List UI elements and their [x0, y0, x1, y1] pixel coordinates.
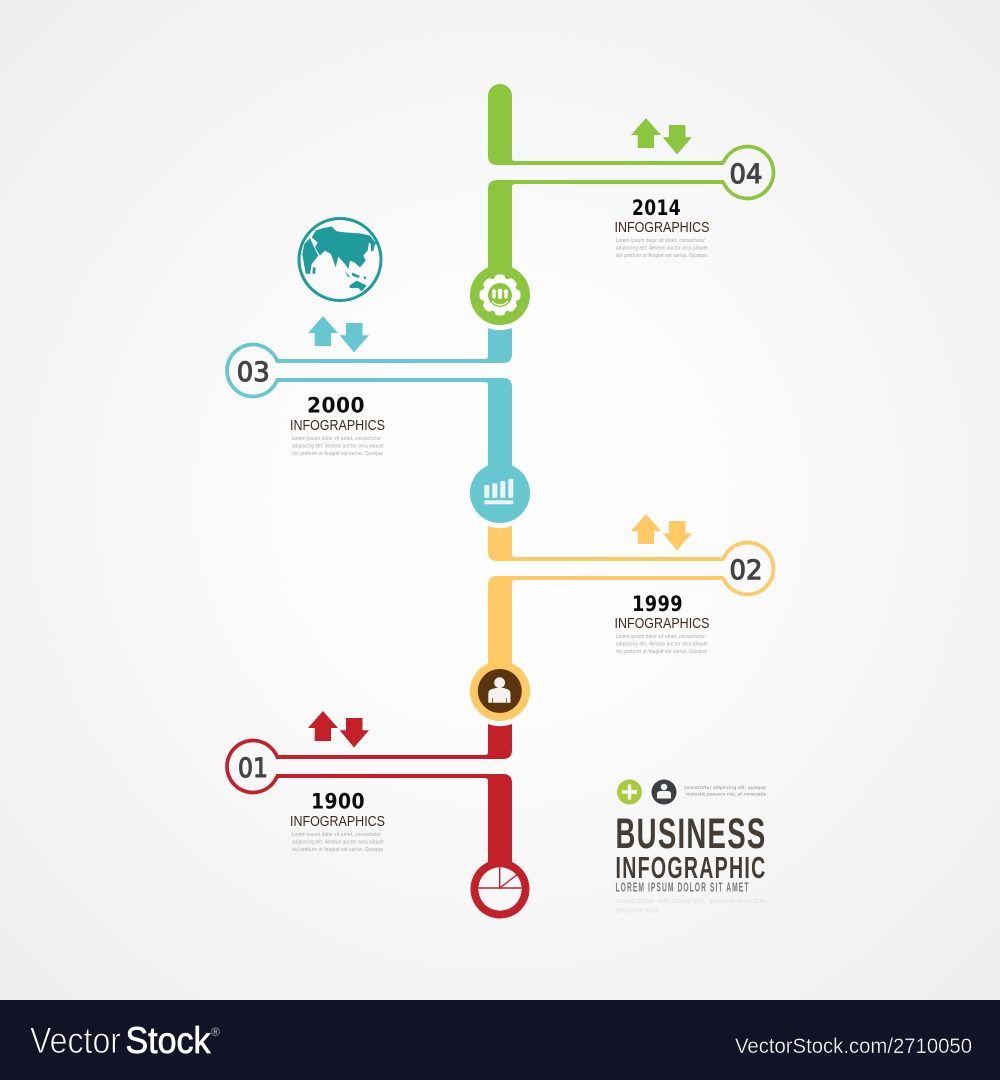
- year label 2014: Lorem ipsum dolor sit amet, consectetur: [616, 238, 706, 244]
- year label 1900: Lorem ipsum dolor sit amet, consectetur: [292, 832, 382, 838]
- heading: infographic: INFOGRAPHIC: [616, 851, 766, 885]
- footer bar: [0, 1000, 1000, 1080]
- icon: gear with people: [470, 265, 530, 325]
- number ring 02: [723, 543, 774, 595]
- caption: [684, 785, 767, 798]
- logo: [30, 1020, 220, 1061]
- yellow lower connector and vertical bar: [488, 576, 724, 676]
- yellow vertical bar and upper connector: [488, 526, 724, 561]
- green lower connector and vertical bar: [488, 180, 724, 280]
- caption: molestie posuere nisi, at venenatis: [686, 792, 767, 798]
- number ring 03: 03: [237, 357, 270, 388]
- year label 2014: 2014: [632, 196, 681, 221]
- faded caption: posuere nisi.: [616, 906, 660, 914]
- logo: Vector: [30, 1020, 121, 1061]
- year label 2000: INFOGRAPHICS: [290, 418, 385, 434]
- business infographic title block: [616, 780, 767, 914]
- arrows up and down: [631, 118, 692, 154]
- arrows up and down: [308, 711, 369, 748]
- year label 1999: dui pretium ut feugiat est varius. Quisque: [616, 649, 707, 655]
- timeline segment 02: yellow: [470, 514, 774, 721]
- green vertical bar and upper connector: [488, 84, 724, 165]
- icon: pie chart: [470, 860, 530, 918]
- year label 2000: dui pretium ut feugiat est varius. Quisque: [292, 451, 383, 457]
- icon: bar chart: [470, 463, 530, 523]
- icon: person: [470, 661, 530, 721]
- year label 2000: [290, 394, 385, 457]
- year label 2000: adipiscing elit. Aenean auctor arcu aliquet: [292, 444, 384, 450]
- faded caption: [616, 897, 766, 914]
- logo: ®: [211, 1025, 220, 1039]
- year label 1900: 1900: [311, 790, 365, 814]
- number ring 01: [227, 741, 277, 792]
- timeline segment 01: red: [227, 711, 529, 918]
- number ring 04: 04: [730, 159, 762, 190]
- year label 2014: adipiscing elit. Aenean auctor arcu aliquet: [616, 246, 708, 252]
- faded caption: consectetur adipiscing elit, quisque molestie: [616, 897, 766, 905]
- year label 1999: INFOGRAPHICS: [614, 616, 710, 632]
- heading: business: BUSINESS: [616, 810, 766, 858]
- number ring 02: 02: [730, 555, 762, 586]
- subheading: LOREM IPSUM DOLOR SIT AMET: [616, 880, 750, 894]
- year label 1900: [290, 790, 385, 853]
- year label 1999: 1999: [632, 592, 683, 617]
- arrows up and down: [308, 316, 369, 352]
- number ring 04: [723, 147, 774, 198]
- icon: globe: [299, 218, 381, 300]
- year label 1999: adipiscing elit. Aenean auctor arcu aliquet: [616, 642, 708, 648]
- year label 1999: Lorem ipsum dolor sit amet, consectetur: [616, 634, 706, 640]
- image id: VectorStock.com/2710050: [735, 1035, 972, 1058]
- red lower connector and vertical bar: [276, 774, 512, 874]
- teal vertical bar and upper connector: [276, 328, 512, 363]
- year label 2014: dui pretium ut feugiat est varius. Quisque: [616, 253, 707, 259]
- year label 1999: [614, 592, 710, 655]
- year label 1900: dui pretium ut feugiat est varius. Quisque: [292, 847, 383, 853]
- arrows up and down: [631, 514, 692, 550]
- year label 1900: INFOGRAPHICS: [290, 814, 385, 830]
- year label 2000: Lorem ipsum dolor sit amet, consectetur: [292, 436, 382, 442]
- number ring 03: [227, 344, 277, 396]
- year label 1900: adipiscing elit. Aenean auctor arcu aliquet: [292, 840, 384, 846]
- timeline segment 03: teal: [227, 316, 530, 523]
- timeline segment 04: green: [470, 84, 774, 325]
- year label 2014: [614, 196, 710, 259]
- icon: person: [652, 780, 676, 804]
- logo: Stock: [126, 1020, 211, 1061]
- icon: plus: [617, 780, 642, 804]
- red vertical bar and upper connector: [276, 724, 512, 759]
- year label 2000: 2000: [307, 394, 365, 418]
- caption: consectetur adipiscing elit, quisque: [684, 785, 766, 791]
- teal lower connector and vertical bar: [276, 378, 512, 478]
- year label 2014: INFOGRAPHICS: [614, 220, 710, 236]
- number ring 01: 01: [238, 753, 268, 784]
